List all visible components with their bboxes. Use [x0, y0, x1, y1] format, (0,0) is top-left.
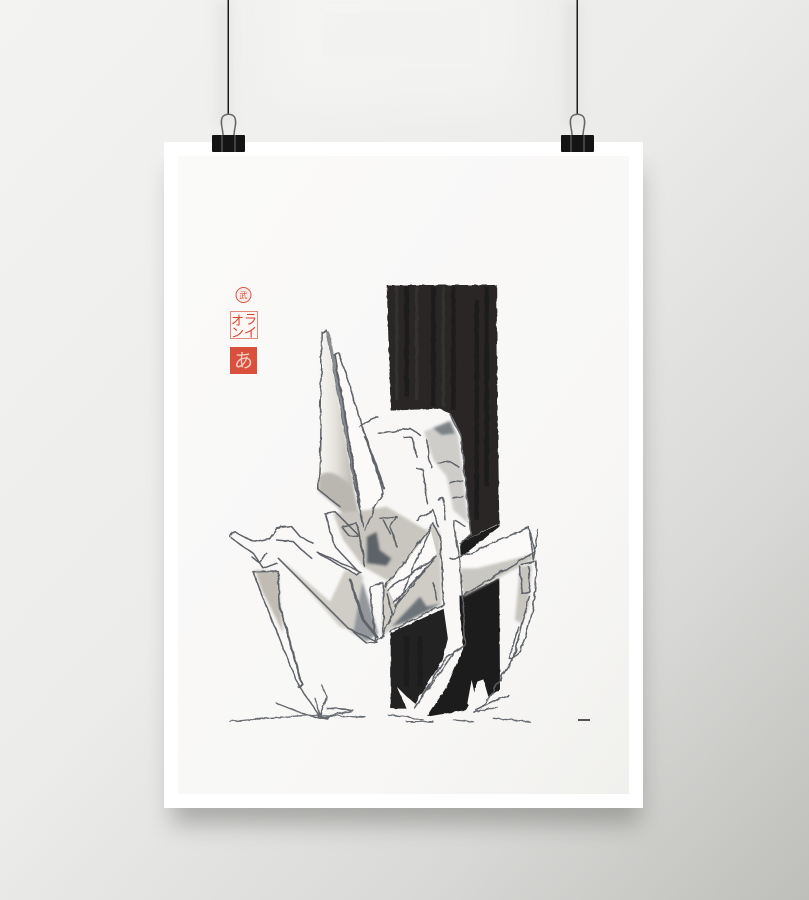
centre folded wing [382, 523, 461, 653]
seal: solid red square stamp: あ [234, 351, 253, 372]
white ink splashes at pillar base [467, 680, 485, 712]
tiny signature mark [578, 719, 590, 721]
poster sheet with white border [164, 142, 643, 808]
illustration: ink crane figure and black pillar [230, 285, 538, 722]
black pillar [387, 285, 500, 717]
right arm [460, 528, 535, 623]
seal: solid red square stamp [230, 347, 257, 374]
crane wing wash [319, 332, 383, 533]
poster drop shadow [172, 170, 640, 824]
crane body [363, 409, 471, 653]
pen linework [230, 331, 538, 717]
seal: round red stamp: 武 [240, 290, 248, 300]
seal: katakana name box: イ [244, 325, 257, 340]
ground scribbles [230, 685, 530, 722]
hanging string left [228, 0, 229, 115]
seal: katakana name box: ン [231, 325, 244, 340]
seal: round red stamp [236, 288, 251, 302]
seal: katakana name box [230, 312, 258, 340]
hanging string right [576, 0, 578, 115]
seal: katakana name box: ラ [244, 312, 257, 327]
left arm wash and claw [255, 570, 283, 633]
crane head and neck wash [280, 507, 433, 642]
icon: binder clip right [561, 114, 594, 152]
seal: katakana name box: オ [231, 313, 244, 328]
icon: binder clip left [212, 114, 245, 152]
